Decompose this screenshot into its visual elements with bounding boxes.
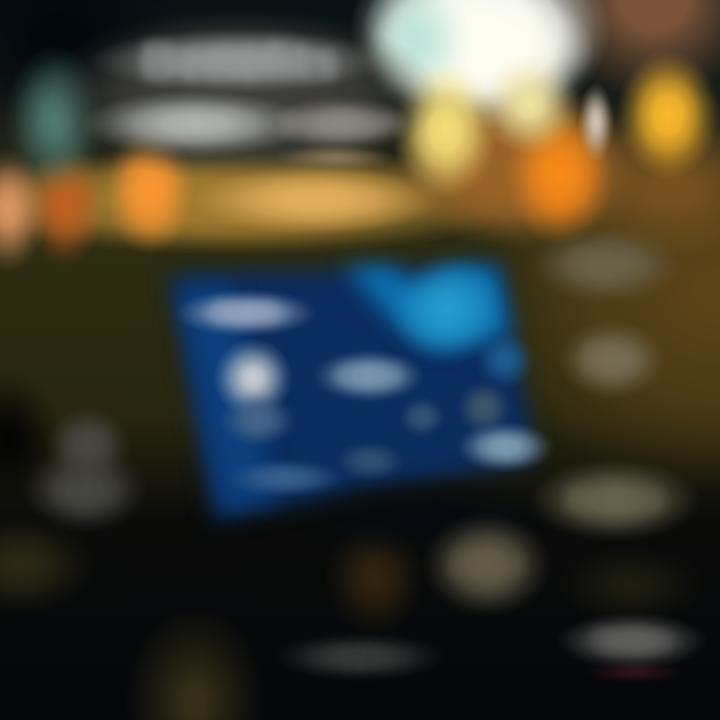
card wave lower lobe [475, 330, 535, 390]
card body [160, 248, 545, 530]
title line one [90, 28, 390, 94]
title line two [80, 90, 310, 158]
card name text [312, 349, 426, 403]
label: savings [22, 446, 148, 534]
title line two text [265, 96, 415, 152]
card wave highlight [387, 255, 507, 365]
label: savings top [45, 406, 131, 484]
card dark lower right [270, 470, 570, 560]
bokeh lights [0, 0, 718, 268]
label: rewards [530, 226, 682, 304]
label: terms [556, 612, 708, 670]
title [65, 18, 432, 177]
label: bonus [528, 458, 702, 542]
card number lines [234, 384, 508, 495]
right labels [31, 232, 700, 678]
card chip shadow [218, 393, 298, 447]
title backing [40, 8, 440, 182]
label: offers [422, 512, 552, 618]
label: fee [558, 320, 666, 400]
title line three [275, 143, 395, 173]
card logo [456, 421, 554, 473]
label: apply [274, 632, 446, 682]
credit card [160, 248, 552, 530]
card brand text [174, 289, 318, 337]
card chip [213, 338, 293, 418]
